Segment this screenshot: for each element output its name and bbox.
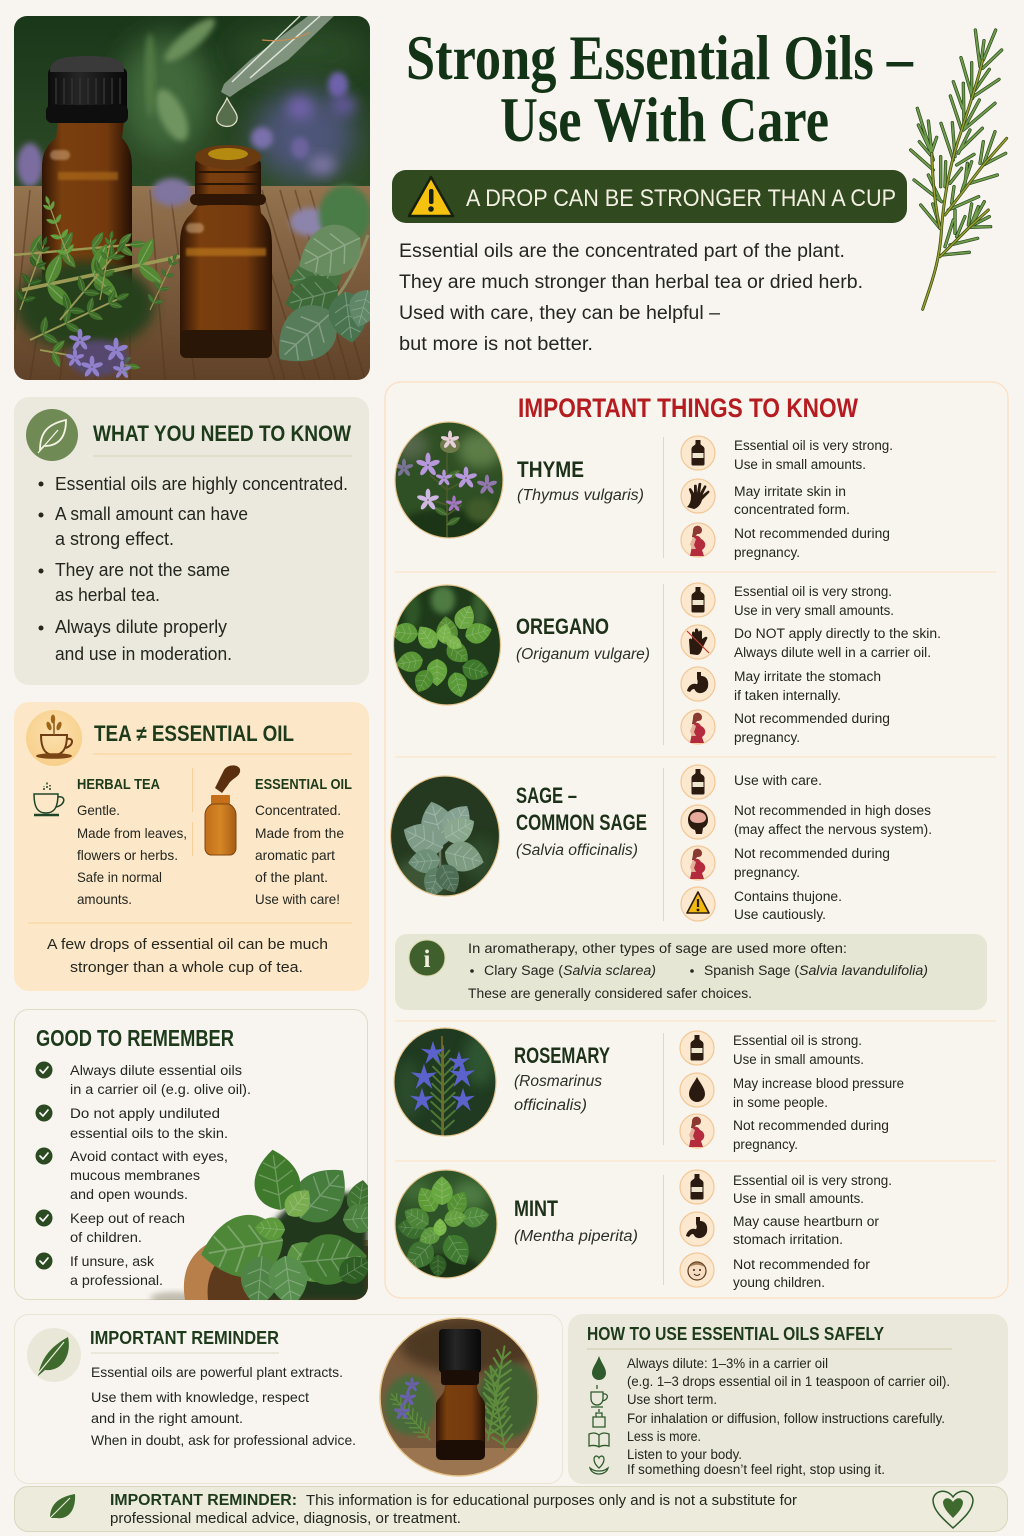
left bottle (42, 56, 132, 300)
warning banner (392, 170, 907, 223)
icon: warning triangle (409, 177, 453, 216)
bullet list: a strong effect. (55, 529, 174, 549)
checklist: and open wounds. (70, 1186, 188, 1202)
mint photo with wooden bowl (148, 1150, 368, 1300)
bullet list (38, 474, 348, 664)
panel: how to use safely (568, 1314, 1008, 1484)
footer disclaimer bar (14, 1486, 1008, 1532)
plant: mint (394, 1170, 892, 1290)
icon: amber dropper bottle (205, 765, 240, 855)
photo: bottle with herbs (380, 1317, 540, 1480)
panel: good to remember (14, 1010, 383, 1309)
banner text: A DROP CAN BE STRONGER THAN A CUP (466, 185, 896, 212)
list: oregano cautions: Use in very small amounts. (734, 603, 894, 618)
herbal tea description: amounts. (77, 891, 132, 907)
title (406, 23, 913, 155)
list: rosemary cautions: Not recommended during (733, 1118, 889, 1133)
icon: tea cup (591, 1385, 607, 1407)
plant: oregano (390, 583, 941, 745)
bullet list: Essential oils are highly concentrated. (55, 474, 348, 494)
safety instructions: Listen to your body. (627, 1447, 742, 1462)
list: sage cautions: Use cautiously. (734, 907, 826, 922)
disclaimer text (110, 1492, 797, 1527)
list: oregano cautions: pregnancy. (734, 730, 800, 745)
list: oregano cautions (681, 583, 941, 745)
list: oregano cautions: Not recommended during (734, 711, 890, 726)
bullet list: They are not the same (55, 560, 230, 580)
essential oil description: of the plant. (255, 869, 328, 885)
lavender sprigs foreground (65, 329, 132, 379)
plant: sage (390, 765, 932, 922)
icon: open book (589, 1433, 609, 1447)
icon: heart (933, 1491, 973, 1528)
safety instructions: Always dilute: 1–3% in a carrier oil (627, 1356, 828, 1371)
safety instructions: Use short term. (627, 1392, 717, 1407)
icon: rosemary sprig (911, 30, 1007, 309)
checklist: mucous membranes (70, 1167, 200, 1183)
checklist: Keep out of reach (70, 1210, 185, 1226)
icon: heart in hand (590, 1456, 608, 1474)
checklist (36, 1062, 251, 1288)
column: herbal tea (34, 776, 187, 907)
list: mint cautions: May cause heartburn or (733, 1214, 880, 1229)
list: sage cautions: Not recommended in high doses (734, 803, 931, 818)
icon: drop (592, 1356, 606, 1380)
heading: IMPORTANT THINGS TO KNOW (518, 393, 858, 423)
disclaimer text: This information is for educational purposes only and is not a substitute for (306, 1493, 797, 1509)
list: sage cautions: Use with care. (734, 773, 822, 788)
intro paragraph: They are much stronger than herbal tea or dried herb. (399, 272, 863, 293)
title: Strong Essential Oils – (406, 23, 913, 93)
callout text: Clary Sage ( (484, 963, 564, 978)
heading: TEA ≠ ESSENTIAL OIL (94, 721, 294, 746)
checklist: in a carrier oil (e.g. olive oil). (70, 1081, 251, 1097)
latin name: rosemary (514, 1073, 602, 1114)
list: rosemary cautions: Essential oil is strong. (733, 1033, 862, 1048)
list: oregano cautions: May irritate the stomach (734, 669, 881, 684)
list: rosemary cautions: Use in small amounts. (733, 1052, 864, 1067)
list: rosemary cautions (680, 1031, 904, 1152)
list: mint cautions: stomach irritation. (733, 1232, 843, 1247)
reminder text: and in the right amount. (91, 1410, 243, 1426)
reminder text: When in doubt, ask for professional advice. (91, 1432, 356, 1448)
latin name: rosemary: officinalis) (514, 1097, 587, 1114)
list: thyme cautions: pregnancy. (734, 545, 800, 560)
heading: GOOD TO REMEMBER (36, 1025, 234, 1051)
checklist: Always dilute essential oils (70, 1062, 242, 1078)
panel: important reminder (14, 1314, 562, 1484)
latin name: oregano: (Origanum vulgare) (516, 646, 650, 663)
list: rosemary cautions: May increase blood pressure (733, 1076, 904, 1091)
photo: sage (390, 776, 500, 902)
list: thyme cautions: Use in small amounts. (734, 457, 866, 472)
checklist: If unsure, ask (70, 1253, 155, 1269)
list: sage cautions (681, 765, 932, 922)
bullet list: as herbal tea. (55, 585, 160, 605)
list: sage cautions: (may affect the nervous system). (734, 822, 932, 837)
list: rosemary cautions: pregnancy. (733, 1137, 798, 1152)
icon: leaf badge (27, 1328, 81, 1382)
disclaimer text: professional medical advice, diagnosis, or treatment. (110, 1511, 461, 1527)
safety instructions: For inhalation or diffusion, follow instructions carefully. (627, 1411, 945, 1426)
intro paragraph: but more is not better. (399, 334, 593, 355)
latin name: mint: (Mentha piperita) (514, 1228, 638, 1245)
list: mint cautions: Not recommended for (733, 1257, 871, 1272)
safety instructions: Less is more. (627, 1429, 701, 1444)
list: thyme cautions: concentrated form. (734, 502, 850, 517)
essential oil description: Use with care! (255, 891, 340, 907)
icon: info badge (409, 940, 445, 976)
heading: essential oil: ESSENTIAL OIL (255, 776, 352, 793)
sage leaves bottom right (279, 182, 370, 362)
list: mint cautions: young children. (733, 1275, 825, 1290)
herbal tea description: flowers or herbs. (77, 847, 178, 863)
name: mint: MINT (514, 1196, 558, 1221)
reminder text: Essential oils are powerful plant extracts. (91, 1364, 343, 1380)
name: rosemary: ROSEMARY (514, 1043, 610, 1068)
list: oregano cautions: Always dilute well in a carrier oil. (734, 645, 931, 660)
essential oil description: aromatic part (255, 847, 335, 863)
panel: what you need to know (14, 397, 369, 685)
intro paragraph (399, 241, 863, 355)
tea callout text: stronger than a whole cup of tea. (70, 959, 303, 976)
heading: HOW TO USE ESSENTIAL OILS SAFELY (587, 1324, 884, 1344)
heading: WHAT YOU NEED TO KNOW (93, 421, 351, 446)
photo: rosemary (394, 1028, 497, 1136)
plant: rosemary (394, 1028, 904, 1152)
list: thyme cautions (681, 436, 893, 560)
heading: herbal tea: HERBAL TEA (77, 776, 160, 793)
right bottle (180, 145, 272, 358)
callout text: Salvia lavandulifolia) (799, 963, 928, 978)
herbal tea description (77, 802, 187, 907)
list: thyme cautions: May irritate skin in (734, 484, 846, 499)
icon: info badge: i (424, 946, 431, 973)
list: sage cautions: Contains thujone. (734, 889, 842, 904)
column: essential oil (205, 765, 352, 907)
intro paragraph: Essential oils are the concentrated part of the plant. (399, 241, 845, 262)
callout: other sage types (395, 934, 987, 1010)
icon: tea cup badge (26, 710, 82, 766)
checklist: of children. (70, 1229, 142, 1245)
callout text (468, 941, 928, 1001)
photo: oregano (390, 585, 501, 705)
hero photo: amber bottles, dropper and herbs (9, 13, 382, 383)
icon: herbal tea cup (34, 781, 64, 815)
essential oil description: Concentrated. (255, 802, 341, 818)
icon: leaf (46, 1494, 75, 1522)
photo: thyme (392, 422, 503, 541)
list: sage cautions: Not recommended during (734, 846, 890, 861)
checklist: essential oils to the skin. (70, 1125, 228, 1141)
latin name: thyme: (Thymus vulgaris) (517, 487, 644, 504)
tea callout text: A few drops of essential oil can be much (47, 936, 328, 953)
checklist: Do not apply undiluted (70, 1105, 220, 1121)
dropper and oil drop (217, 16, 334, 126)
name: sage: COMMON SAGE (516, 810, 647, 835)
name: sage (516, 783, 647, 835)
panel: important things to know (385, 382, 1008, 1298)
safety instructions: If something doesn’t feel right, stop using it. (627, 1462, 885, 1477)
name: oregano: OREGANO (516, 614, 609, 639)
callout text: Salvia sclarea) (563, 963, 656, 978)
reminder text (91, 1364, 356, 1448)
list: thyme cautions: Not recommended during (734, 526, 890, 541)
list: oregano cautions: Essential oil is very strong. (734, 584, 892, 599)
photo: mint (394, 1170, 498, 1282)
latin name: sage: (Salvia officinalis) (516, 842, 638, 859)
plant: thyme (392, 422, 893, 560)
bullet list: Always dilute properly (55, 617, 227, 637)
icon: leaf badge (26, 409, 78, 461)
name: sage: SAGE – (516, 783, 577, 808)
title: Use With Care (500, 85, 829, 155)
thyme sprigs (14, 196, 180, 374)
name: thyme: THYME (517, 457, 584, 482)
list: sage cautions: pregnancy. (734, 865, 800, 880)
bullet list: and use in moderation. (55, 644, 232, 664)
checklist: a professional. (70, 1272, 163, 1288)
herbal tea description: Made from leaves, (77, 825, 187, 841)
callout text: In aromatherapy, other types of sage are used more often: (468, 941, 847, 956)
checklist: Avoid contact with eyes, (70, 1148, 228, 1164)
callout text: Spanish Sage ( (704, 963, 800, 978)
panel: tea vs essential oil (14, 702, 369, 991)
intro paragraph: Used with care, they can be helpful – (399, 303, 720, 324)
icon: diffuser (593, 1409, 605, 1427)
herbal tea description: Gentle. (77, 802, 120, 818)
list: oregano cautions: if taken internally. (734, 688, 841, 703)
essential oil description (255, 802, 344, 907)
list: oregano cautions: Do NOT apply directly to the skin. (734, 626, 941, 641)
reminder text: Use them with knowledge, respect (91, 1389, 309, 1405)
heading: IMPORTANT REMINDER (90, 1328, 279, 1348)
bullet list: A small amount can have (55, 504, 248, 524)
safety instructions: (e.g. 1–3 drops essential oil in 1 teaspoon of carrier oil). (627, 1374, 950, 1389)
safety instructions (627, 1356, 950, 1477)
herbal tea description: Safe in normal (77, 869, 162, 885)
list: mint cautions: Use in small amounts. (733, 1191, 864, 1206)
list: rosemary cautions: in some people. (733, 1095, 828, 1110)
latin name: rosemary: (Rosmarinus (514, 1073, 602, 1090)
callout text: These are generally considered safer choices. (468, 986, 752, 1001)
disclaimer text: IMPORTANT REMINDER: (110, 1492, 297, 1509)
essential oil description: Made from the (255, 825, 344, 841)
tea callout text (47, 936, 328, 976)
list: mint cautions (680, 1170, 892, 1290)
list: thyme cautions: Essential oil is very strong. (734, 438, 893, 453)
list: mint cautions: Essential oil is very strong. (733, 1173, 892, 1188)
